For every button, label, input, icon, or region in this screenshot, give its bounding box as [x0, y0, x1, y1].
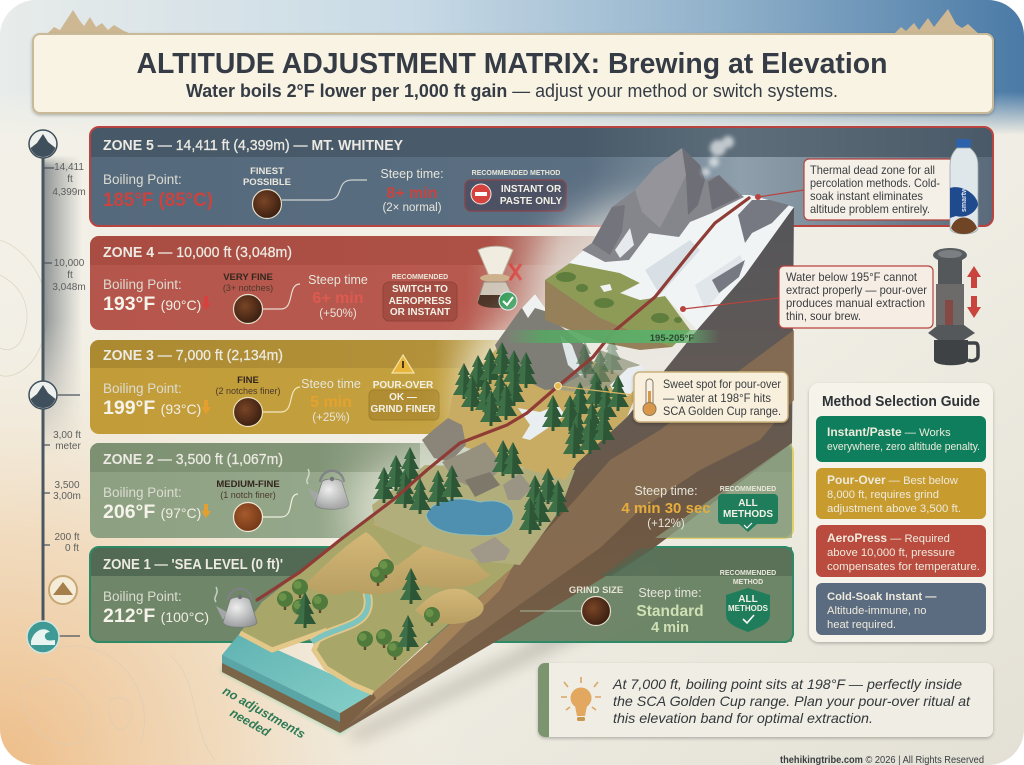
zone 2 steep time: Steep time: [634, 484, 698, 498]
zone 3 heading: ZONE 3 — 7,000 ft (2,134m) [103, 348, 283, 364]
callout: pour-over tip: the SCA Golden Cup range. Plan your pour-over ritual at [613, 693, 971, 709]
zone 1 steep time [636, 586, 704, 636]
callout: sweet spot: Sweet spot for pour-over [663, 377, 781, 391]
195-205 degree band [505, 330, 720, 344]
callout: below 195F: thin, sour brew. [786, 309, 861, 323]
card: pour-over: 8,000 ft, requires grind [827, 489, 939, 501]
lowland trees [277, 559, 440, 660]
card: instant paste: everywhere, zero altitude penalty. [827, 441, 980, 453]
zone 2 steep time [621, 484, 711, 530]
ground shadow [345, 555, 660, 740]
zone 1 right content [510, 547, 793, 642]
zone 3 boiling point: 199°F (93°C) [103, 397, 201, 419]
card: aeropress: compensates for temperature. [827, 561, 980, 573]
brewing altitude route [257, 198, 749, 600]
glow beneath sea block [222, 668, 378, 730]
zone 1 recommended shield: RECOMMENDED [720, 570, 776, 577]
snow patches [518, 365, 645, 440]
195-205 degree band: 195-205°F [650, 333, 694, 344]
zone 2 recommended badge [718, 486, 778, 532]
zone 1 boiling point: 212°F (100°C) [103, 605, 209, 627]
elevation labels: 3,00m [53, 491, 81, 502]
zone 2 boiling point: 206°F (97°C) [103, 501, 201, 523]
callout: pour-over tip [538, 663, 993, 737]
callout: below 195F: Water below 195°F cannot [786, 270, 918, 284]
zone 1 recommended shield [720, 570, 776, 632]
zone 3 steep time: (+25%) [312, 412, 350, 424]
zone 3 method warning: POUR-OVER [373, 380, 434, 391]
elevation labels: meter [55, 441, 81, 452]
callout: below 195F [680, 266, 933, 328]
icon: pour-over dripper [478, 246, 521, 310]
card: cold-soak [816, 583, 986, 635]
zone 5 steep time: 8+ min [386, 185, 438, 202]
zone 1 tint [510, 547, 792, 642]
zone 4 recommended method: AEROPRESS [389, 296, 452, 307]
zone 5 boiling point: Boiling Point: [103, 172, 182, 187]
zone 4 steep time [308, 273, 368, 320]
zone 4 grind: VERY FINE [223, 272, 273, 283]
icon: thermometer [643, 379, 656, 416]
zone 1 boiling point: Boiling Point: [103, 589, 182, 604]
zone 4 boiling point: Boiling Point: [103, 277, 182, 292]
zone 4 steep time: (+50%) [319, 308, 357, 320]
panel: zone 2 [90, 443, 793, 538]
zone 4 heading: ZONE 4 — 10,000 ft (3,048m) [103, 245, 292, 261]
mountain terrain cross-section [222, 136, 794, 740]
zone 3 method warning: OK — [389, 392, 417, 403]
card: cold-soak: Altitude-immune, no [827, 605, 926, 617]
zone 2 steep time: 4 min 30 sec [621, 500, 711, 517]
card: cold-soak: Cold-Soak Instant — [827, 591, 937, 603]
icon: left banner mountains [46, 10, 134, 35]
card: pour-over: Pour-Over — Best below [827, 473, 959, 487]
panel: zone 5 [90, 127, 993, 226]
label: no adjustments needed: no adjustments [220, 684, 308, 741]
title: ALTITUDE ADJUSTMENT MATRIX: Brewing at Elevation [136, 48, 888, 80]
elevation labels: 3,048m [52, 282, 86, 293]
callout: sweet spot: — water at 198°F hits [663, 391, 771, 405]
subtitle: Water boils 2°F lower per 1,000 ft gain — adjust your method or switch systems. [186, 81, 838, 101]
elevation labels: ft [67, 174, 73, 185]
tan hills [305, 472, 490, 624]
callout: thermal dead zone: Thermal dead zone for all [810, 163, 935, 177]
elevation labels: 10,000 [54, 258, 85, 269]
icon: foothill marker [49, 576, 77, 604]
zone 1 recommended shield: METHOD [733, 579, 763, 586]
card: aeropress [816, 525, 986, 577]
main peak [582, 148, 744, 262]
zone 5 recommended method [465, 170, 566, 211]
icon: mid mountain marker [28, 381, 58, 411]
zone 1 steep time: 4 min [651, 620, 689, 636]
snowfield [569, 195, 794, 330]
icon: water bottle [950, 139, 978, 234]
zone 4 recommended method [383, 274, 457, 321]
zone 4 boiling point: 193°F (90°C) [103, 293, 201, 315]
callout: below 195F: extract properly — pour-over [786, 283, 927, 297]
zone 1 heading: ZONE 1 — 'SEA LEVEL (0 ft)' [103, 557, 283, 573]
zone 2 recommended badge: METHODS [723, 509, 773, 520]
pine forests [373, 338, 629, 604]
zone 4 recommended method: RECOMMENDED [392, 274, 448, 281]
zone 5 steep time [380, 167, 444, 214]
zone 4 grind [223, 272, 300, 324]
zone 5 grind: POSSIBLE [243, 177, 291, 188]
panel: zone 4 [90, 236, 600, 330]
river and shore [240, 572, 402, 693]
icon: light bulb [561, 677, 601, 721]
zone 1 grind: GRIND SIZE [569, 585, 623, 596]
card: instant paste [816, 416, 986, 462]
callout: pour-over tip: At 7,000 ft, boiling point sits at 198°F — perfectly inside [612, 676, 962, 692]
callout: thermal dead zone [755, 159, 954, 220]
zone 2 heading: ZONE 2 — 3,500 ft (1,067m) [103, 452, 283, 468]
green tier [545, 263, 690, 350]
zone 5 boiling point [103, 172, 213, 211]
callout: sweet spot [554, 372, 788, 422]
zone 4 recommended method: OR INSTANT [390, 307, 450, 318]
zone 5 grind [243, 166, 367, 218]
callout: sweet spot: SCA Golden Cup range. [663, 404, 781, 418]
zone 3 method warning [369, 355, 439, 420]
zone 3 boiling point: Boiling Point: [103, 381, 182, 396]
guide heading: Method Selection Guide [822, 394, 980, 410]
label: no adjustments needed: needed [227, 706, 273, 740]
callout: pour-over tip: this elevation band for optimal extraction. [613, 710, 873, 726]
zone 5 steep time: Steep time: [380, 167, 444, 181]
zone 2 grind: (1 notch finer) [220, 490, 276, 500]
zone 3 method warning: GRIND FINER [370, 404, 436, 415]
elevation labels: ft [67, 270, 73, 281]
panel: zone 3 [90, 340, 570, 434]
zone 3 grind: (2 notches finer) [215, 386, 281, 396]
zone 5 recommended method: INSTANT OR [501, 184, 562, 195]
callout: thermal dead zone: altitude problem entirely. [810, 202, 930, 216]
zone 2 right content [621, 443, 792, 538]
zone 4 steep time: Steep time [308, 273, 368, 287]
callout: thermal dead zone: soak instant eliminates [810, 189, 923, 203]
zone 5 recommended method: PASTE ONLY [500, 196, 562, 207]
elevation labels: 4,399m [52, 187, 86, 198]
zone 3 steep time: 5 min [310, 394, 352, 411]
zone 1 recommended shield: ALL [738, 594, 758, 605]
zone 2 grind [216, 479, 298, 532]
summit steam [702, 136, 734, 176]
zone 5 boiling point: 185°F (85°C) [103, 189, 213, 211]
zone 5 recommended method: RECOMMENDED METHOD [472, 170, 560, 177]
zone 4 steep time: 6+ min [312, 290, 364, 307]
lowland [240, 470, 545, 693]
zone 3 grind [215, 375, 300, 426]
elevation labels: 3,500 [54, 480, 80, 491]
icon: sea level wave marker [27, 621, 59, 653]
lake tier [372, 465, 575, 565]
snowfield shadows [645, 240, 745, 310]
zone 2 recommended badge: ALL [738, 498, 758, 509]
zone 3 steep time [301, 377, 361, 424]
panel: method selection guide [809, 383, 993, 642]
zone 3 grind: FINE [237, 375, 259, 386]
icon: right banner mountains [893, 9, 980, 35]
zone 2 grind: MEDIUM-FINE [216, 479, 280, 490]
card: pour-over [816, 468, 986, 519]
icon: sea level kettle [215, 587, 257, 627]
card: aeropress: AeroPress — Required [827, 531, 950, 545]
zone 4 boiling point [103, 277, 211, 315]
card: cold-soak: heat required. [827, 619, 896, 631]
zone 3 boiling point [103, 381, 211, 419]
panel: zone 1 [90, 547, 793, 642]
elevation labels: 0 ft [65, 543, 79, 554]
small snow-capped peak [495, 294, 640, 395]
altitude timeline [27, 130, 86, 653]
card: aeropress: above 10,000 ft, pressure [827, 547, 955, 559]
elevation labels: 200 ft [54, 532, 80, 543]
icon: water bottle: smartwater [961, 174, 968, 212]
zone 2 recommended badge: RECOMMENDED [720, 486, 776, 493]
zone 1 recommended shield: METHODS [728, 604, 769, 613]
right ridge rocks [712, 200, 789, 293]
zone 2 boiling point [103, 485, 211, 523]
zone 1 boiling point [103, 589, 209, 627]
card: instant paste: Instant/Paste — Works [827, 425, 951, 439]
icon: aeropress [928, 248, 981, 365]
card: pour-over: adjustment above 3,500 ft. [827, 503, 961, 515]
cliff face [340, 207, 794, 733]
elevation labels: 14,411 [54, 162, 84, 173]
tan upper tier [445, 345, 640, 480]
zone 3 steep time: Steeo time [301, 377, 361, 391]
zone 1 steep time: Steep time: [638, 586, 702, 600]
zone 5 steep time: (2× normal) [382, 202, 442, 214]
zone 4 recommended method: SWITCH TO [392, 284, 448, 295]
zone 2 boiling point: Boiling Point: [103, 485, 182, 500]
halo behind mountain [350, 200, 750, 560]
zone 5 heading: ZONE 5 — 14,411 ft (4,399m) — MT. WHITNEY [103, 138, 403, 154]
zone 2 tint over right [655, 443, 792, 538]
callout: below 195F: produces manual extraction [786, 296, 925, 310]
zone 5 grind: FINEST [250, 166, 284, 177]
rocks [422, 418, 532, 563]
icon: summit marker [28, 130, 58, 160]
title banner [33, 9, 993, 113]
zone 2 steep time: (+12%) [647, 518, 685, 530]
zone 1 steep time: Standard [636, 603, 704, 620]
elevation labels [52, 162, 86, 554]
sea block [222, 633, 376, 733]
icon: kettle zone 2 [307, 469, 349, 509]
elevation labels: 3,00 ft [53, 430, 81, 441]
zone 4 grind: (3+ notches) [223, 283, 273, 293]
zone 1 grind [520, 585, 623, 626]
callout: thermal dead zone: percolation methods. Cold- [810, 176, 940, 190]
